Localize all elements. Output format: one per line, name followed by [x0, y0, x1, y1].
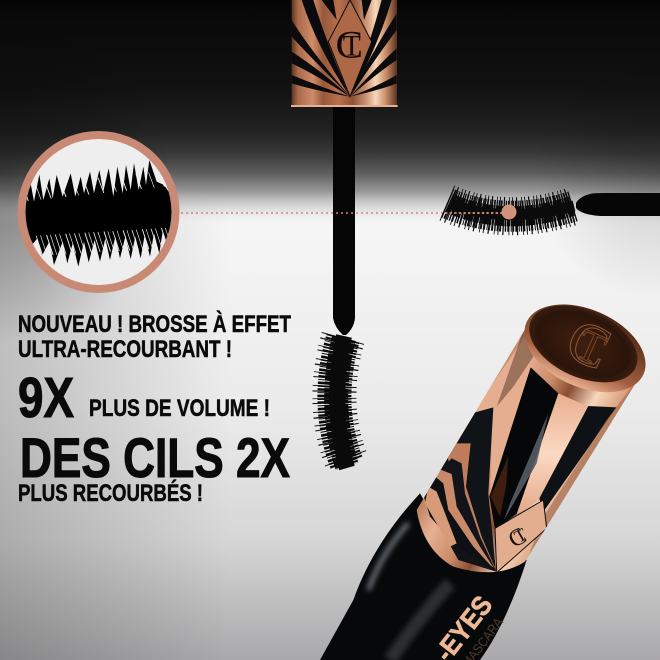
cap diamond logo — [510, 528, 526, 546]
mascara cap: copper with art deco rays — [291, 0, 398, 107]
text: lashes 2X: DES CILS 2X — [20, 426, 290, 489]
connector overlay on brush — [445, 212, 505, 214]
tube body — [320, 493, 527, 660]
large mascara tube — [320, 287, 659, 660]
dotted connector line — [181, 212, 510, 214]
connector dot — [502, 204, 516, 220]
brush handle — [576, 193, 660, 216]
mascara wand: vertical — [291, 0, 398, 468]
brush bristles — [447, 203, 574, 216]
eyelash curler brush: horizontal — [445, 193, 660, 216]
text: new brush: NOUVEAU ! BROSSE À EFFET — [18, 310, 291, 338]
cap logo: C — [336, 22, 363, 66]
cap diamond — [495, 500, 547, 573]
magnified bristles — [26, 160, 172, 266]
text: more curled: PLUS RECOURBÉS ! — [18, 479, 203, 507]
lens ring — [22, 135, 176, 289]
text: more volume: PLUS DE VOLUME ! — [89, 395, 270, 422]
wand brush: curved bristles — [334, 336, 347, 468]
text: ultra curl: ULTRA-RECOURBANT ! — [18, 336, 232, 363]
cap end monogram: T — [569, 320, 613, 375]
text: 9X: 9X — [18, 366, 74, 430]
cap end monogram: C — [557, 306, 620, 382]
cap logo: T — [343, 30, 361, 62]
cap stripes — [424, 327, 645, 572]
headline text block — [18, 310, 291, 507]
tube cap side — [416, 330, 635, 572]
cap diamond logo: T — [511, 524, 530, 547]
wand stem — [333, 104, 355, 335]
magnified lash lens — [18, 131, 180, 293]
cap end face — [511, 287, 659, 410]
cap diamond logo: C — [504, 523, 531, 553]
